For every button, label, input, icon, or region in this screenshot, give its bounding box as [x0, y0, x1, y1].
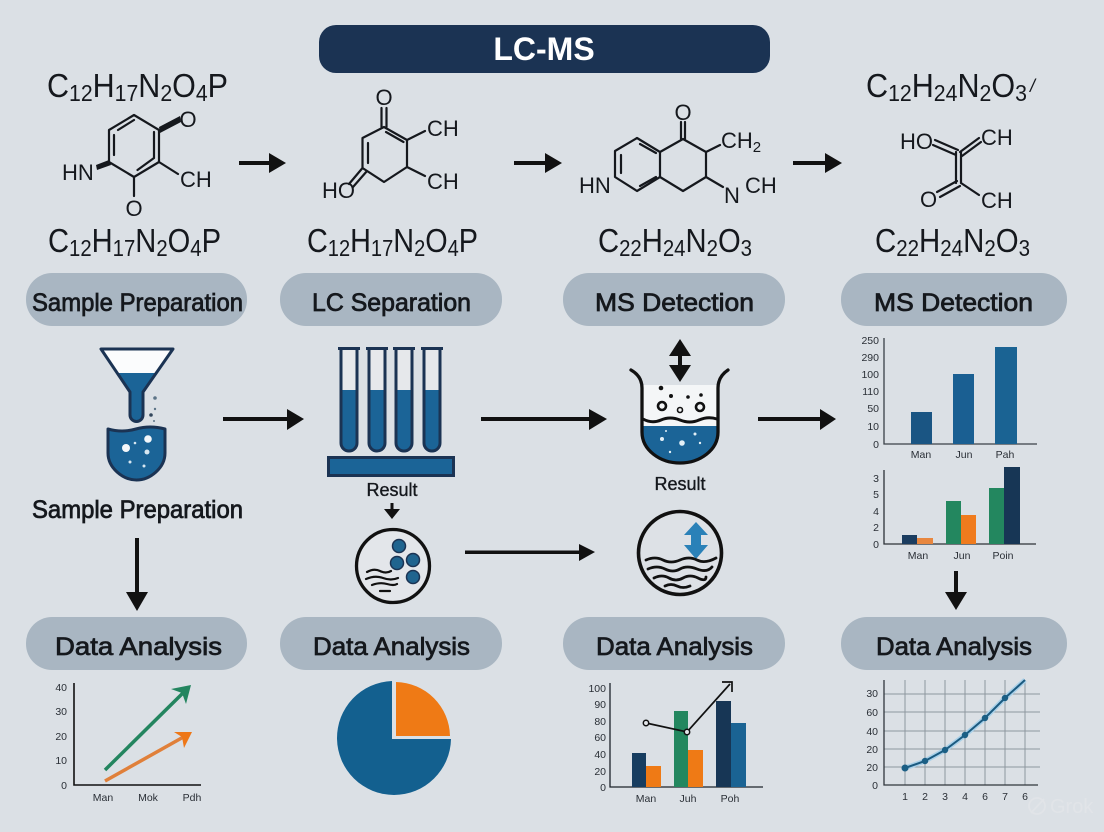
line chart: grid: 1 — [902, 791, 908, 803]
bar and line chart: 60 — [594, 732, 606, 744]
formula bottom 2: 12 — [328, 235, 350, 261]
molecule 1 — [62, 107, 212, 221]
molecule 4 — [900, 76, 1037, 213]
bar chart: grouped right: 0 — [873, 539, 879, 551]
icon: double arrow — [669, 339, 691, 382]
line chart: grid: 7 — [1002, 791, 1008, 803]
arrow: LC to MS — [481, 409, 607, 430]
formula bottom 3: O — [718, 222, 741, 259]
molecule 1: HN — [62, 160, 94, 185]
arrow: molecule 3 to 4 — [793, 153, 842, 173]
molecule 3 — [579, 100, 777, 208]
formula bottom 1: 17 — [113, 235, 135, 261]
line chart: grid: 6 — [982, 791, 988, 803]
molecule 4: / — [1028, 76, 1037, 96]
molecule 1: O — [125, 196, 143, 221]
formula bottom 1: O — [168, 222, 190, 259]
formula bottom 1: H — [92, 222, 113, 259]
molecule 2: CH — [427, 169, 459, 194]
formula bottom 4: C — [875, 222, 899, 259]
formula bottom 1: N — [135, 222, 156, 259]
formula bottom 4: 3 — [1019, 235, 1030, 261]
molecule 1: CH — [180, 167, 212, 192]
watermark — [1029, 796, 1094, 818]
watermark: Grok — [1050, 796, 1094, 818]
line chart: trend arrows: 0 — [61, 780, 67, 792]
formula top 1: O — [172, 67, 196, 104]
molecule 4: O — [920, 187, 937, 212]
arrow: result down — [384, 503, 400, 519]
bar and line chart: 80 — [594, 716, 606, 728]
pill: data analysis 2 — [280, 617, 502, 670]
bar and line chart: 20 — [594, 766, 606, 778]
pill: MS detection 2 — [841, 273, 1067, 326]
formula bottom 2: 4 — [448, 235, 459, 261]
formula bottom 3: C — [598, 222, 622, 259]
formula bottom 2: N — [393, 222, 414, 259]
pill: data analysis 3 — [563, 617, 785, 670]
bar chart: top right: Man — [911, 449, 931, 461]
line chart: grid: 60 — [866, 707, 878, 719]
formula top 4: 3 — [1015, 80, 1027, 106]
bar chart: grouped right: 3 — [873, 473, 879, 485]
bar chart: grouped right: Jun — [954, 550, 971, 562]
molecule 3: 2 — [753, 139, 761, 156]
formula bottom 4: O — [996, 222, 1019, 259]
bar chart: grouped right — [873, 467, 1036, 562]
pill: LC separation: LC Separation — [312, 289, 471, 317]
molecule 3: HN — [579, 173, 611, 198]
formula bottom 4: 2 — [984, 235, 996, 261]
formula bottom 1: 2 — [156, 235, 168, 261]
arrow: preparation to LC — [223, 409, 304, 430]
bar and line chart: Man — [636, 793, 656, 805]
formula top 1: P — [208, 67, 228, 104]
formula top 4: C — [866, 67, 890, 104]
arrow: preparation down — [126, 538, 148, 611]
pill: MS detection 2: MS Detection — [874, 289, 1033, 317]
line chart: grid: 4 — [962, 791, 968, 803]
arrow: MS to charts — [758, 409, 836, 430]
bar and line chart: Juh — [680, 793, 697, 805]
line chart: trend arrows: 40 — [55, 682, 67, 694]
bar and line chart: 90 — [594, 699, 606, 711]
formula bottom 2: 17 — [371, 235, 393, 261]
pill: data analysis 4 — [841, 617, 1067, 670]
formula bottom 4: 24 — [940, 235, 963, 261]
formula bottom 2: C — [307, 222, 331, 259]
line chart: grid: 20 — [866, 762, 878, 774]
molecule 4: HO — [900, 129, 933, 154]
formula top 1: 12 — [69, 80, 93, 106]
formula bottom 2: O — [425, 222, 448, 259]
line chart: grid: 3 — [942, 791, 948, 803]
line chart: trend arrows: Mok — [138, 792, 159, 804]
bar chart: top right: Jun — [956, 449, 973, 461]
formula bottom 2: 2 — [414, 235, 425, 261]
formula top 1: N — [138, 67, 160, 104]
line chart: trend arrows: 10 — [55, 755, 67, 767]
formula top 4: 2 — [980, 80, 991, 106]
bar chart: top right: 290 — [861, 352, 879, 364]
line chart: trend arrows: 20 — [55, 731, 67, 743]
bar chart: top right: 0 — [873, 439, 879, 451]
pill: sample preparation: Sample Preparation — [32, 289, 243, 317]
icon: waves in circle — [638, 512, 722, 594]
line chart: trend arrows: Man — [93, 792, 113, 804]
pie chart — [337, 681, 451, 795]
line chart: trend arrows: Pdh — [183, 792, 201, 804]
formula bottom 3: 24 — [663, 235, 686, 261]
bar and line chart: 100 — [588, 683, 606, 695]
line chart: grid — [866, 680, 1040, 803]
bar chart: top right: 10 — [867, 421, 879, 433]
molecule 2 — [322, 85, 459, 203]
line chart: grid: 2 — [922, 791, 928, 803]
bar chart: top right — [861, 335, 1037, 461]
label: result 1: Result — [366, 480, 418, 500]
formula bottom 1: C — [48, 222, 72, 259]
pill: data analysis 1: Data Analysis — [55, 633, 222, 661]
molecule 3: CH — [745, 173, 777, 198]
bar chart: top right: 50 — [867, 403, 879, 415]
formula top 4: 12 — [888, 80, 912, 106]
pill: data analysis 3: Data Analysis — [596, 633, 753, 661]
pill: sample preparation — [26, 273, 247, 326]
pill: MS detection: MS Detection — [595, 289, 754, 317]
pill: LC separation — [280, 273, 502, 326]
bar chart: top right: 100 — [861, 369, 879, 381]
title banner: LC-MS — [493, 31, 595, 67]
formula bottom 1: 12 — [69, 235, 92, 261]
molecule 3: CH — [721, 128, 753, 153]
bar and line chart: 0 — [600, 782, 606, 794]
bar chart: grouped right: 4 — [873, 506, 879, 518]
icon: funnel and beaker — [101, 349, 173, 480]
line chart: grid: 6 — [1022, 791, 1028, 803]
bar chart: top right: Pah — [996, 449, 1014, 461]
line chart: trend arrows — [55, 682, 201, 804]
pill: data analysis 2: Data Analysis — [313, 633, 470, 661]
title banner — [319, 25, 770, 73]
formula bottom 4: N — [963, 222, 984, 259]
icon: MS chamber — [631, 370, 728, 463]
formula top 4: 24 — [934, 80, 958, 106]
molecule 4: CH — [981, 188, 1013, 213]
molecule 2: CH — [427, 116, 459, 141]
formula bottom 1: 4 — [190, 235, 202, 261]
bar and line chart: Poh — [721, 793, 739, 805]
molecule 2: HO — [322, 178, 355, 203]
formula bottom 4: 22 — [896, 235, 919, 261]
label: result 2: Result — [654, 474, 706, 494]
bar and line chart — [588, 682, 763, 805]
formula top 1: H — [93, 67, 115, 104]
bar chart: top right: 110 — [862, 386, 879, 398]
formula top 1: 17 — [115, 80, 138, 106]
formula bottom 3: 22 — [619, 235, 642, 261]
line chart: grid: 40 — [866, 726, 878, 738]
formula top 4: O — [991, 67, 1015, 104]
molecule 3: N — [724, 183, 740, 208]
line chart: trend arrows: 30 — [55, 706, 67, 718]
formula top 4: H — [912, 67, 934, 104]
label: sample preparation: Sample Preparation — [32, 496, 243, 524]
molecule 1: O — [179, 107, 197, 132]
bar chart: grouped right: 5 — [873, 489, 879, 501]
pill: data analysis 4: Data Analysis — [876, 633, 1032, 661]
pill: data analysis 1 — [26, 617, 247, 670]
bar chart: grouped right: Man — [908, 550, 928, 562]
bar chart: grouped right: Poin — [992, 550, 1014, 562]
line chart: grid: 30 — [866, 688, 878, 700]
formula top 4: N — [957, 67, 980, 104]
formula top 1: 4 — [196, 80, 208, 106]
formula bottom 3: N — [686, 222, 707, 259]
arrow: charts down — [945, 571, 967, 610]
arrow: molecule 1 to 2 — [239, 153, 286, 173]
icon: particles in circle — [356, 530, 430, 602]
arrow: molecule 2 to 3 — [514, 153, 562, 173]
line chart: grid: 0 — [872, 780, 878, 792]
formula bottom 3: 2 — [707, 235, 718, 261]
formula top 1: 2 — [160, 80, 172, 106]
molecule 3: O — [674, 100, 692, 125]
bar chart: grouped right: 2 — [873, 522, 879, 534]
formula top 1: C — [47, 67, 71, 104]
line chart: grid: 20 — [866, 744, 878, 756]
arrow: particles to waves — [465, 544, 595, 561]
formula bottom 2: P — [459, 222, 478, 259]
bar and line chart: 40 — [594, 749, 606, 761]
molecule 4: CH — [981, 125, 1013, 150]
formula bottom 1: P — [202, 222, 221, 259]
formula bottom 2: H — [350, 222, 371, 259]
molecule 2: O — [375, 85, 393, 110]
icon: LC column tubes — [328, 348, 454, 476]
formula bottom 4: H — [919, 222, 940, 259]
bar chart: top right: 250 — [861, 335, 879, 347]
pill: MS detection — [563, 273, 785, 326]
formula bottom 3: H — [642, 222, 663, 259]
formula bottom 3: 3 — [741, 235, 752, 261]
